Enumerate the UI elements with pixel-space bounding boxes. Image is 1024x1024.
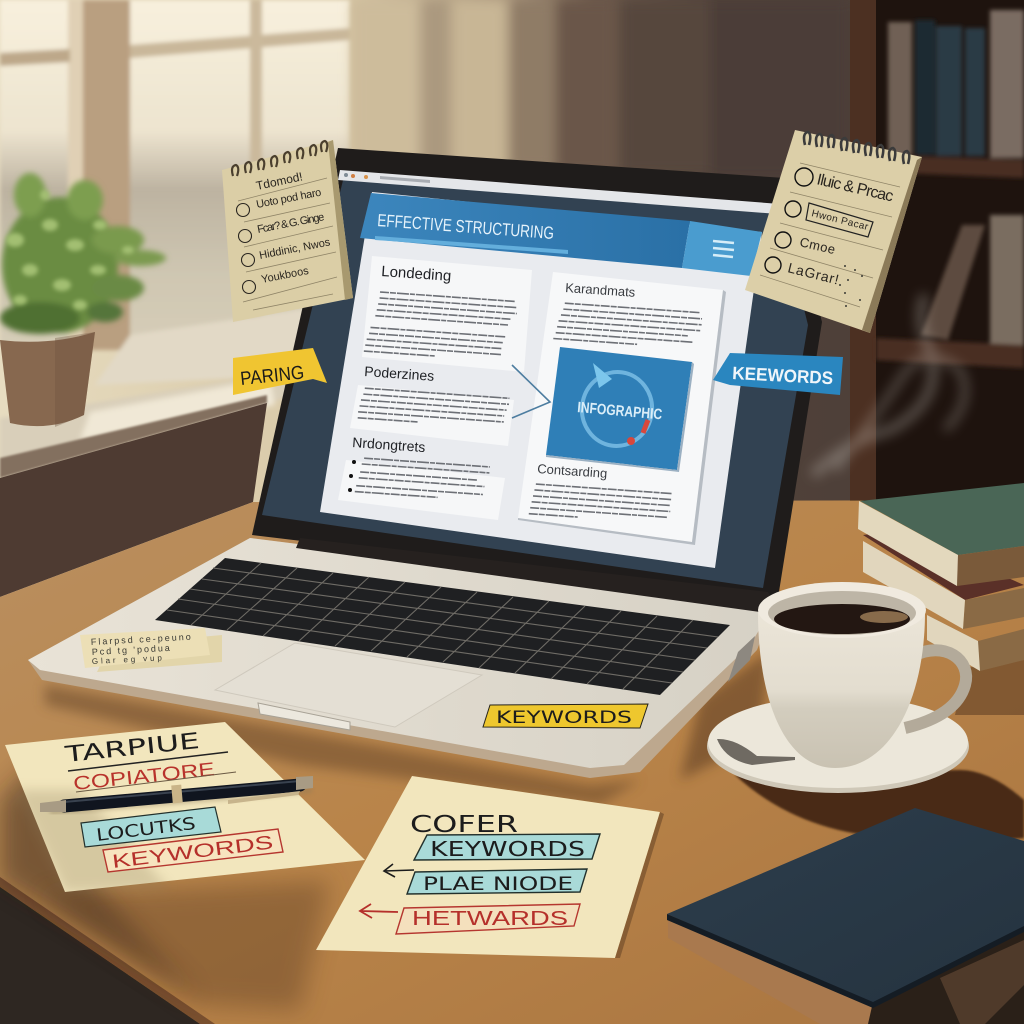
notebook [667,808,1024,1024]
tag: PARING: PARING [239,362,305,390]
keyboard [155,558,730,695]
bookshelf [850,0,1024,520]
sticky labels on palm rest: Pcd tg 'podua [92,643,170,657]
sticky labels on palm rest: Glar eg vup [92,653,163,666]
paper left: COPIATORE [72,759,216,795]
card: Poderzines: Poderzines [364,363,435,384]
web page panel [320,192,762,568]
card: Nrdongtrets [338,434,505,520]
card: Londeding: Londeding [381,263,452,285]
boxed note item [806,203,873,237]
pen [40,776,313,812]
card: Karandmats: Contsarding [537,461,608,481]
arrow to infographic [512,365,550,418]
paper left [5,722,365,892]
label: PLAE NIODE: PLAE NIODE [423,873,573,895]
book: bottom [927,615,1024,671]
note: top left checklist: Youkboos [260,265,310,286]
cup shadow on desk [735,770,1024,840]
laptop [28,148,822,778]
book: middle [863,530,1024,629]
page header [360,193,762,276]
label: LOCUTKS [81,807,221,847]
label: HETWARDS [396,904,580,934]
label: LOCUTKS: LOCUTKS [95,814,197,846]
note: top right checklist [745,130,922,333]
laptop lid and screen [252,148,822,598]
tag: KEEWORDS [713,353,843,395]
desk [0,500,1024,1024]
plant in pot [0,173,166,427]
laptop base [28,538,778,778]
label: KEYWORDS red [103,829,283,873]
stack of books [858,483,1024,671]
browser bar [338,170,780,214]
infographic tile: INFOGRAPHIC [577,399,663,423]
note: top left checklist: Hiddinic, Nwos [258,236,332,262]
note: top left checklist [222,140,353,322]
keywords sticker: KEYWORDS [496,708,632,728]
curtain [352,0,850,180]
note: top left checklist: Fcar? & G. Ginge [256,211,325,236]
paper right [316,776,664,958]
label: HETWARDS: HETWARDS [412,908,568,930]
card: Karandmats: Karandmats [565,280,636,300]
card: Karandmats [518,272,726,545]
card: Londeding [362,256,532,372]
book: top [858,483,1024,586]
background room [0,0,1024,620]
tag: PARING [233,348,327,395]
header title: EFFECTIVE STRUCTURING [377,210,555,243]
label: KEYWORDS red: KEYWORDS [111,832,274,873]
keywords sticker [483,704,648,728]
arrow: red [360,904,398,918]
sticky labels on palm rest [80,628,222,672]
menu icon [713,241,734,257]
note: top right checklist: LaGrar! [786,259,841,287]
note: top left checklist: Uoto pod haro [255,187,322,211]
paper left: TARPIUE [63,729,201,768]
note: top right checklist: Iluic & Prcac [815,171,895,205]
arrow: black [384,864,414,877]
card: Poderzines [350,363,514,446]
trackpad notch [258,703,350,730]
paper right: COFER [410,812,518,838]
coffee cup [758,582,966,768]
sticky labels on palm rest: Flarpsd ce-peuno [91,632,191,647]
trackpad [215,643,482,727]
steam [813,295,965,475]
card: Nrdongtrets: Nrdongtrets [352,434,426,455]
saucer and spoon [707,696,969,793]
label: KEYWORDS teal [414,834,600,861]
note: top right checklist: Cmoe [798,234,837,257]
boxed note item: Hwon Pacar [810,208,870,233]
note: top left checklist: Tdomod! [255,169,304,193]
window sill and wall [0,345,350,597]
window [0,0,350,385]
label: PLAE NIODE [407,869,587,895]
infographic tile [546,347,694,472]
tag: KEEWORDS: KEEWORDS [732,363,834,388]
label: KEYWORDS teal: KEYWORDS [430,837,585,861]
